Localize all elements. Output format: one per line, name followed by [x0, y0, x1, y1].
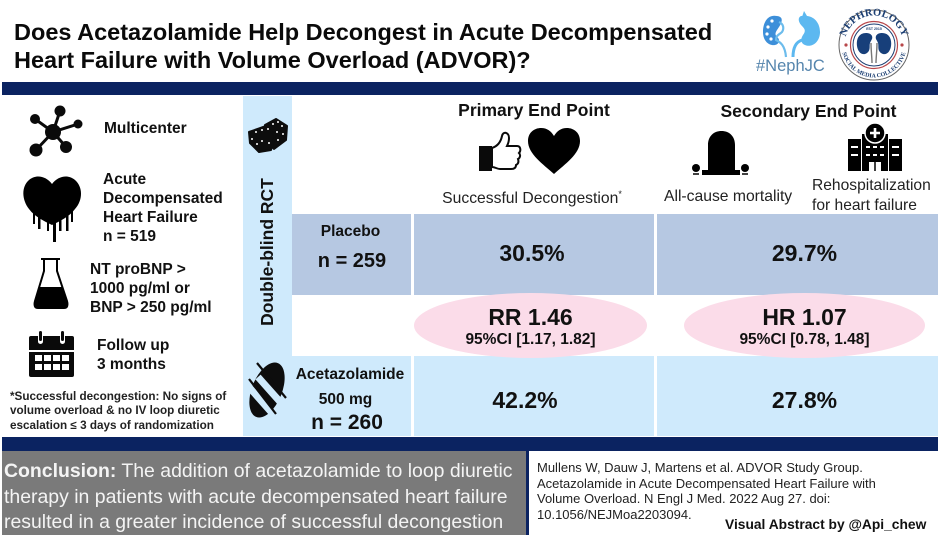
panel: placebo primary result: 30.5%: [499, 240, 565, 266]
text: HR CI: 95%CI [0.78, 1.48]: [739, 331, 870, 348]
icon: dice: [248, 118, 288, 153]
text: biomarkers: NT proBNP >: [90, 261, 186, 278]
icon: crossed-out pills: [248, 362, 287, 418]
text: conclusion: resulted in a greater incidence of successful decongestion: [4, 511, 503, 533]
text: biomarkers: [90, 261, 212, 316]
text: placebo: Placebo: [321, 223, 380, 240]
callout: hazard ratio: [684, 293, 925, 358]
top navy band: [2, 82, 938, 95]
panel: placebo label: [292, 214, 411, 295]
footnote: volume overload & no IV loop diuretic: [10, 404, 220, 417]
heading: primary end point: Primary End Point: [458, 100, 610, 120]
icon: thumbs up: [479, 132, 522, 171]
text: rehospitalization: [812, 177, 931, 214]
panel: double-blind RCT column: [243, 96, 292, 436]
text: dose: 500 mg: [319, 391, 372, 408]
callout: relative risk: [414, 293, 647, 358]
vertical navy divider: [526, 451, 529, 535]
icon: bleeding heart: [23, 176, 81, 242]
text: acetazolamide n: n = 260: [311, 411, 383, 434]
panel: acetazolamide secondary result: 27.8%: [772, 387, 837, 413]
text: follow up: 3 months: [97, 356, 166, 373]
text: citation: [537, 460, 876, 522]
text: multicenter: Multicenter: [104, 120, 187, 137]
panel: placebo primary result: [414, 214, 654, 295]
logo: Nephrology Social Media Collective: SOCIAL MEDIA COLLECTIVE: [842, 52, 906, 78]
text: population: Decompensated: [103, 190, 223, 207]
text: population: Acute: [103, 171, 146, 188]
text: successful decongestion: Successful Decongestion*: [442, 189, 622, 207]
text: all-cause mortality: All-cause mortality: [664, 188, 792, 205]
text: RR CI: 95%CI [1.17, 1.82]: [465, 331, 596, 348]
logo: NephJC: [756, 11, 825, 75]
text: population: Heart Failure: [103, 209, 198, 226]
logo: Nephrology Social Media Collective: EST 2015: [866, 27, 882, 31]
title: Heart Failure with Volume Overload (ADVOR)?: [14, 46, 531, 72]
text: population: [103, 171, 223, 245]
icon: heart: [528, 128, 580, 174]
title: [14, 19, 712, 73]
logo: NephJC: #NephJC: [756, 57, 825, 75]
heading: secondary end point: Secondary End Point: [720, 101, 896, 121]
text: rehospitalization: for heart failure: [812, 196, 917, 214]
text: citation: 10.1056/NEJMoa2203094.: [537, 506, 692, 522]
text: RR: RR 1.46: [488, 304, 573, 330]
text: conclusion: Conclusion: The addition of acetazolamide to loop diuretic: [4, 460, 513, 482]
footnote: *Successful decongestion: No signs of: [10, 390, 226, 403]
text: conclusion: therapy in patients with acute decompensated heart failure: [4, 486, 508, 508]
text: HR: HR 1.07: [762, 304, 847, 330]
text: double-blind RCT: Double-blind RCT: [257, 178, 277, 326]
panel: acetazolamide primary result: [414, 356, 654, 436]
text: follow up: Follow up: [97, 337, 169, 354]
icon: flask: [34, 258, 68, 309]
panel: acetazolamide secondary result: [657, 356, 938, 436]
panel: acetazolamide primary result: 42.2%: [492, 387, 558, 413]
text: biomarkers: 1000 pg/ml or: [90, 280, 190, 297]
title: Does Acetazolamide Help Decongest in Acute Decompensated: [14, 19, 712, 45]
text: rehospitalization: Rehospitalization: [812, 177, 931, 194]
text: citation: Volume Overload. N Engl J Med. 2022 Aug 27. doi:: [537, 491, 830, 506]
icon: tombstone: [692, 131, 749, 175]
icon: calendar: [29, 331, 74, 377]
text: biomarkers: BNP > 250 pg/ml: [90, 299, 212, 316]
text: citation: Mullens W, Dauw J, Martens et al. ADVOR Study Group.: [537, 460, 863, 475]
panel: acetazolamide label: [292, 356, 411, 436]
text: acetazolamide: Acetazolamide: [296, 366, 404, 383]
icon: hospital: [848, 124, 902, 171]
footnote: escalation ≤ 3 days of randomization: [10, 419, 214, 432]
text: conclusion: [4, 460, 513, 533]
text: citation: Acetazolamide in Acute Decompensated Heart Failure with: [537, 476, 876, 490]
panel: placebo secondary result: [657, 214, 938, 295]
icon: network: [30, 106, 82, 156]
text: follow up: [97, 337, 169, 373]
panel: placebo secondary result: 29.7%: [772, 240, 837, 266]
text: placebo n: n = 259: [318, 250, 386, 272]
logo: Nephrology Social Media Collective: NEPHROLOGY: [839, 8, 909, 37]
logo: Nephrology Social Media Collective: [838, 8, 910, 80]
panel: conclusion: [2, 451, 526, 535]
text: credit: Visual Abstract by @Api_chew: [725, 517, 926, 532]
text: population: n = 519: [103, 228, 156, 245]
bottom navy band: [2, 437, 938, 451]
footnote: [10, 390, 226, 432]
